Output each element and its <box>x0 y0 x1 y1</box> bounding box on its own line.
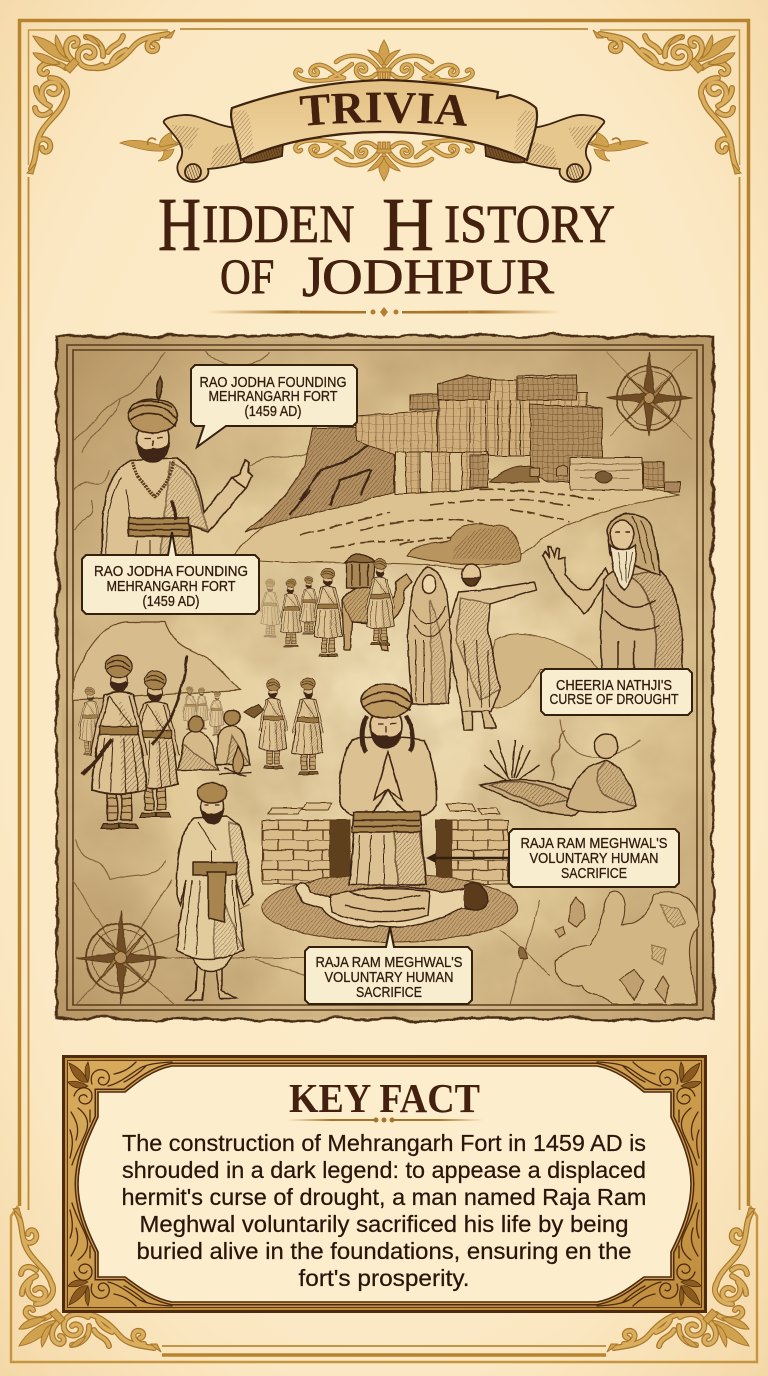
callout: raja ram right <box>509 829 679 887</box>
callout: raja ram right: SACRIFICE <box>561 866 627 882</box>
onlookers <box>183 687 197 729</box>
compass rose top right <box>606 352 692 440</box>
title line one: H <box>158 183 201 267</box>
callout: rao jodha top: MEHRANGARH FORT <box>208 389 338 405</box>
warrior group left <box>79 655 187 828</box>
hill under fort <box>232 428 680 569</box>
key fact body text: Meghwal voluntarily sacrificed his life by being <box>140 1211 628 1237</box>
key fact body text: The construction of Mehrangarh Fort in 1459 AD is <box>122 1130 646 1156</box>
key fact body text: shrouded in a dark legend: to appease a displaced <box>122 1157 646 1183</box>
banner flourishes <box>120 40 648 181</box>
callout: cheeria nathji: CHEERIA NATHJI'S <box>556 678 672 694</box>
first warrior <box>91 656 147 828</box>
callout: rao jodha lower: MEHRANGARH FORT <box>106 579 236 595</box>
kneeling man <box>178 716 218 770</box>
torn parchment sheet <box>57 336 713 1019</box>
banner tails <box>164 115 604 182</box>
far soldier <box>79 687 101 755</box>
camel handler <box>366 559 394 645</box>
camp fire <box>218 746 252 776</box>
title line two: ODHPUR <box>322 248 555 304</box>
callout: raja ram lower: RAJA RAM MEGHWAL'S <box>316 955 462 971</box>
callout: raja ram lower: SACRIFICE <box>356 985 422 1001</box>
figure: praying man <box>340 684 436 885</box>
callout: raja ram lower: VOLUNTARY HUMAN <box>324 970 454 986</box>
far pilgrims <box>261 579 279 637</box>
corner ornament bottom-right <box>607 1208 755 1352</box>
caravan walker two <box>300 576 318 634</box>
panel ornate border <box>64 1056 706 1312</box>
title line one: H <box>382 183 434 267</box>
onlooker two <box>195 687 209 729</box>
key fact body text: buried alive in the foundations, ensuring en the <box>136 1238 632 1264</box>
key fact heading: KEY FACT <box>289 1075 480 1121</box>
onlooker three <box>210 691 224 735</box>
key fact body text: fort's prosperity. <box>298 1265 470 1291</box>
offering bowl <box>244 704 264 718</box>
callout: rao jodha lower <box>82 532 259 614</box>
second warrior <box>132 671 178 817</box>
figure: standing man foreground <box>176 783 252 1000</box>
far hills left <box>73 622 240 700</box>
arrow to praying man <box>426 853 509 863</box>
standing offerer <box>259 680 287 768</box>
title line two: OF <box>220 248 285 304</box>
banner main band <box>231 80 537 160</box>
callout: rao jodha lower: RAO JODHA FOUNDING <box>94 564 248 580</box>
map illustration panel <box>57 336 713 1019</box>
callout: cheeria nathji: CURSE OF DROUGHT <box>550 692 679 708</box>
dug earth around body <box>262 874 518 942</box>
map crack lines <box>73 350 640 1005</box>
main title <box>158 183 615 309</box>
title line one: IDDEN <box>202 194 367 254</box>
brick pit <box>262 803 508 884</box>
banner label: TRIVIA <box>300 92 467 126</box>
caravan walkers <box>280 579 302 647</box>
figure: pointing man <box>450 564 536 730</box>
callout: cheeria nathji <box>541 669 692 715</box>
standing praying man <box>293 678 323 774</box>
title line two: J <box>302 244 324 309</box>
caravan with camel <box>261 554 412 656</box>
camel <box>342 554 412 650</box>
key fact body text: hermit's curse of drought, a man named Raja Ram <box>122 1184 646 1210</box>
dagger <box>83 740 112 775</box>
figure: lying man <box>296 882 488 927</box>
compass rose bottom left <box>76 910 168 1004</box>
figure: veiled woman <box>408 567 451 704</box>
corner ornament bottom-left <box>13 1208 161 1352</box>
curved sword <box>152 655 187 745</box>
title divider <box>206 307 562 317</box>
callout: rao jodha top <box>191 365 357 447</box>
callout: raja ram lower <box>305 927 472 1004</box>
callout: rao jodha top: RAO JODHA FOUNDING <box>200 375 346 391</box>
corner ornament top-left <box>27 30 175 174</box>
shore patch right <box>480 634 600 708</box>
corner ornament top-right <box>593 30 741 174</box>
seated man <box>216 710 250 765</box>
callout: raja ram right: RAJA RAM MEGHWAL'S <box>520 836 668 852</box>
figure: rao jodha <box>102 376 252 558</box>
fire camp group <box>178 678 323 776</box>
rocky slope <box>245 428 394 532</box>
key fact panel <box>64 1056 706 1312</box>
heading divider <box>287 1118 483 1122</box>
mehrangarh fort <box>356 375 680 494</box>
callout: raja ram right: VOLUNTARY HUMAN <box>530 851 658 867</box>
caravan leader <box>314 568 342 656</box>
callout: rao jodha lower: (1459 AD) <box>142 594 200 610</box>
panel cream field <box>78 1066 691 1302</box>
europe sketch map <box>519 891 698 1004</box>
title line one: ISTORY <box>444 194 615 254</box>
callout: rao jodha top: (1459 AD) <box>244 404 302 420</box>
trivia banner <box>119 39 649 183</box>
figure: seated hermit <box>480 730 636 815</box>
figure: hermit <box>543 514 682 670</box>
